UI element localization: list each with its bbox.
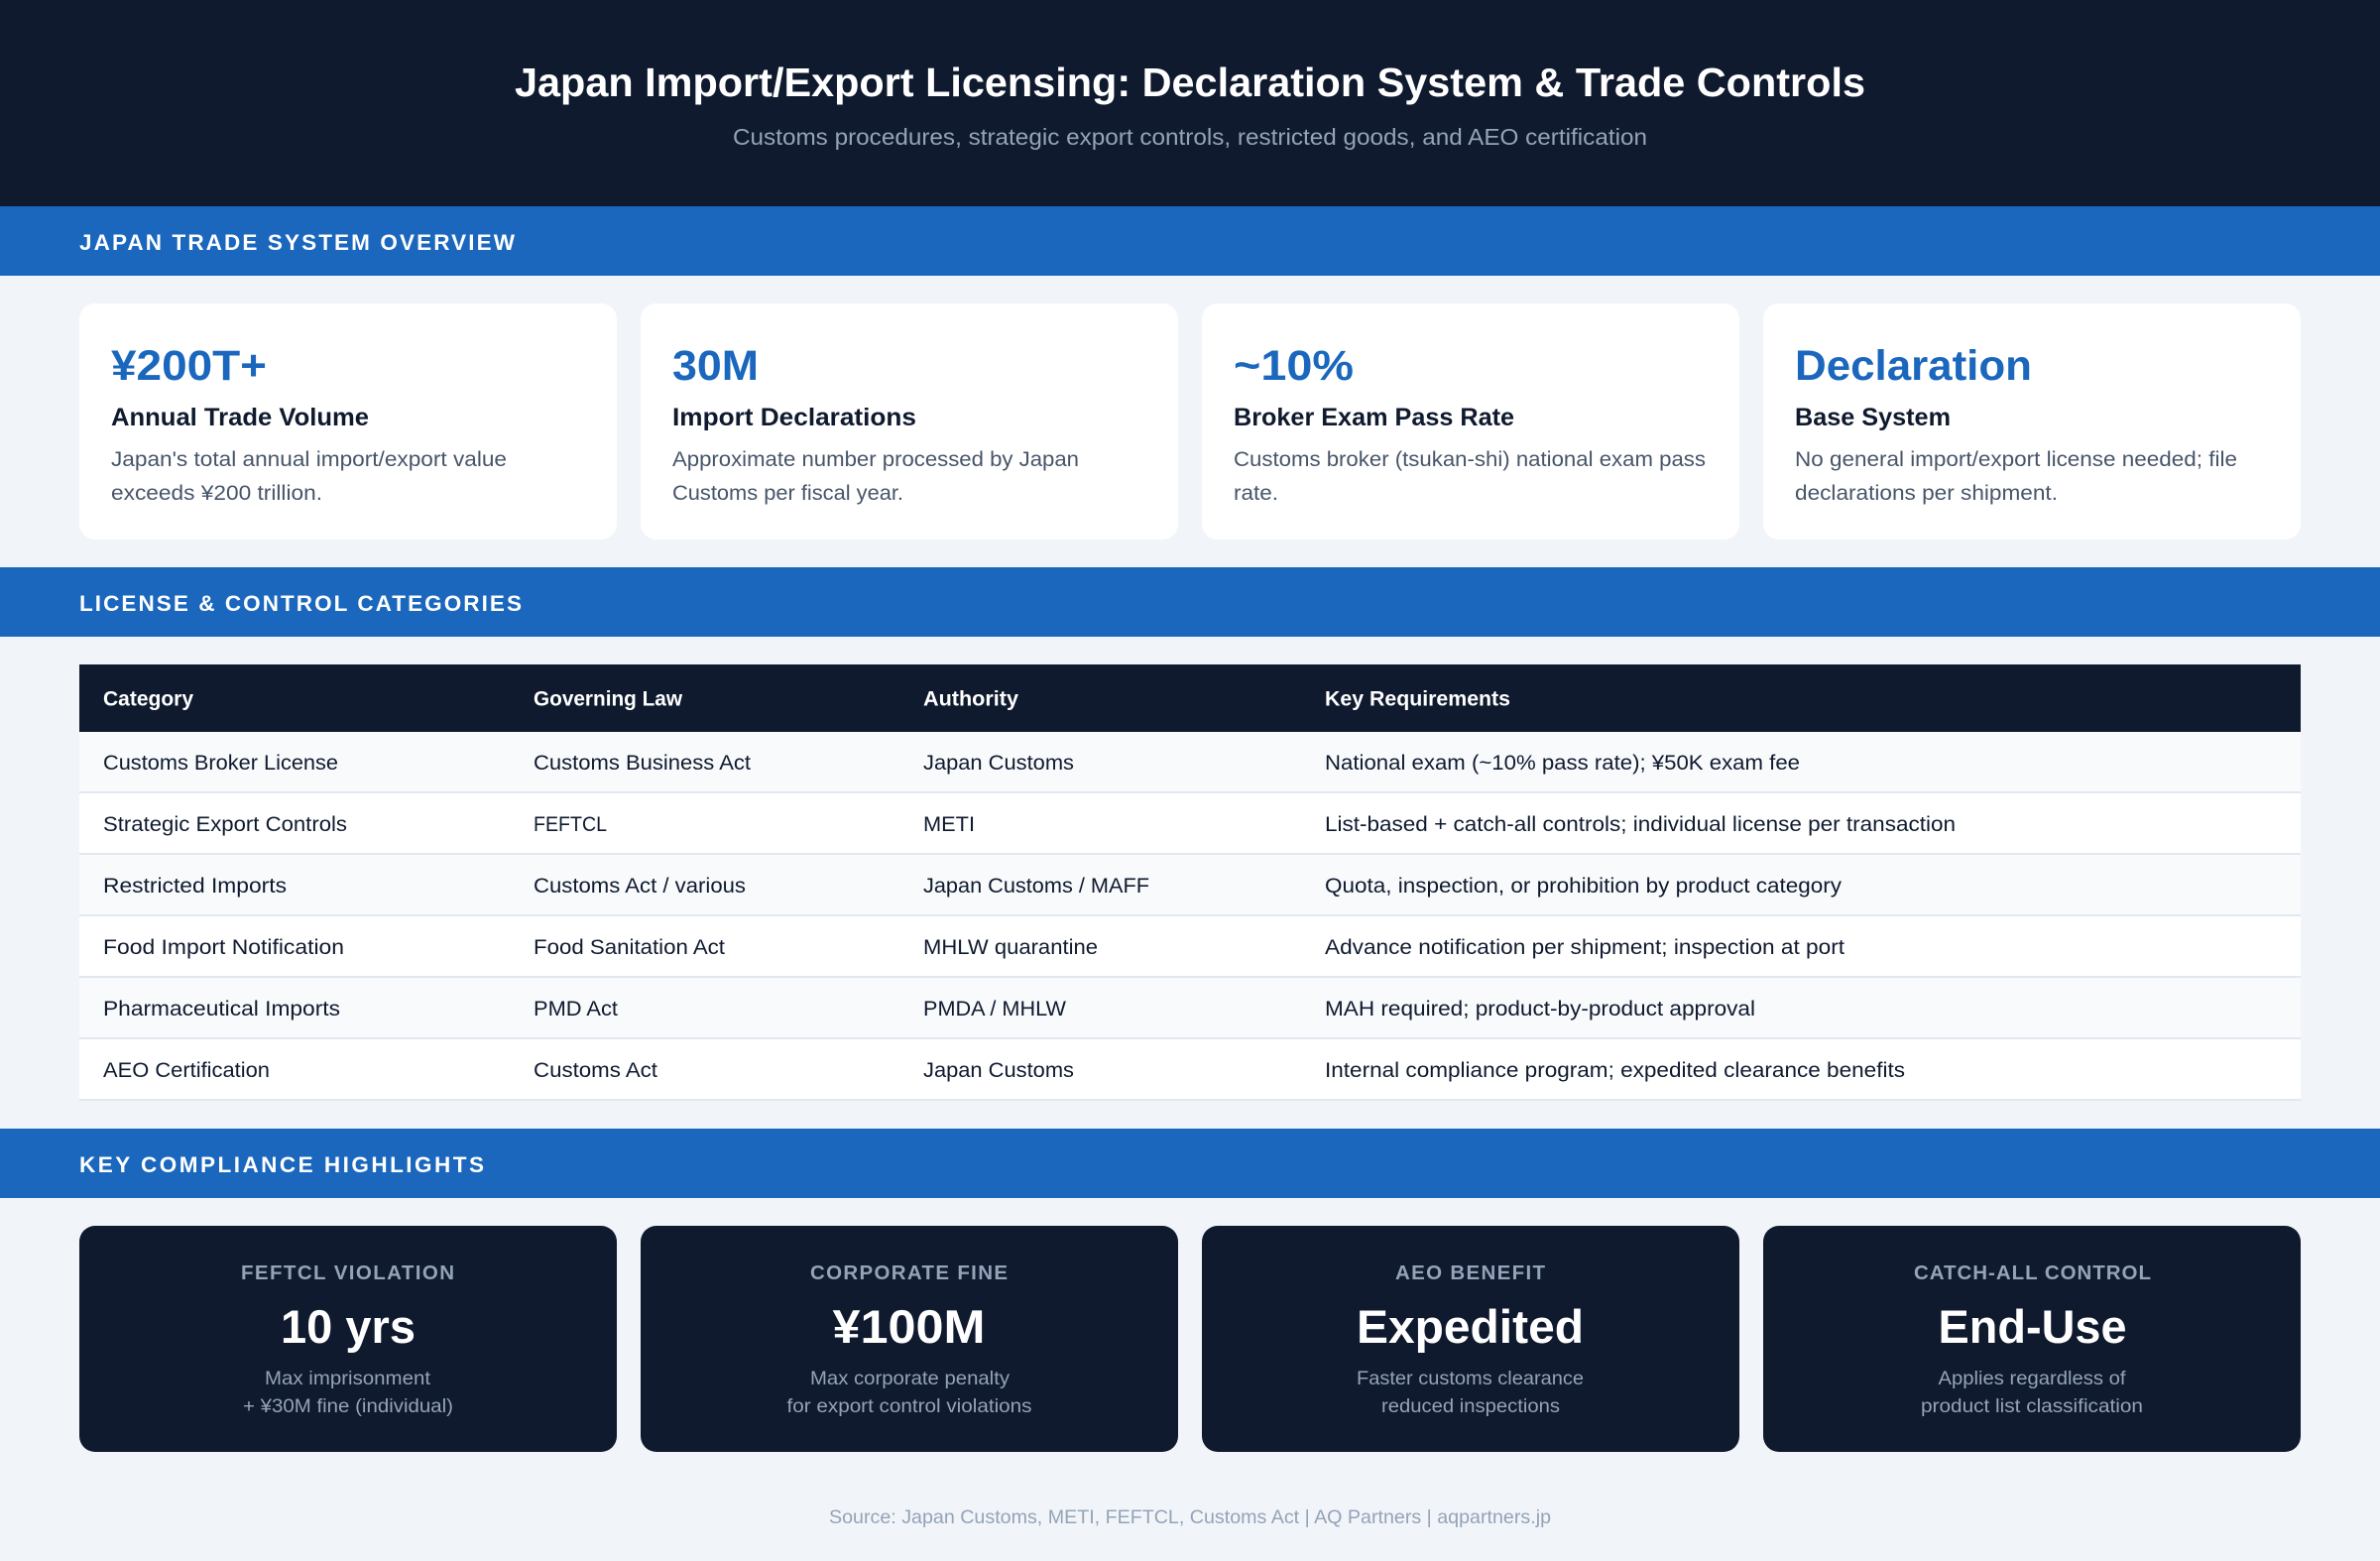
table row: food import notification: Advance notification per shipment; inspection at port (1325, 935, 1844, 959)
table row: strategic export controls (79, 793, 2301, 855)
panel: highlight corporate fine: Max corporate penalty (810, 1368, 1010, 1389)
panel: stat card import declarations: Customs per fiscal year. (672, 481, 903, 505)
table row: pharmaceutical imports: PMDA / MHLW (923, 997, 1067, 1021)
panel: stat card trade volume: Japan's total annual import/export value (111, 447, 507, 471)
panel: highlight FEFTCL violation: 10 yrs (281, 1300, 416, 1353)
panel: stat card trade volume (79, 303, 617, 540)
table row: food import notification: Food Sanitation Act (534, 935, 725, 959)
table row: AEO certification: Customs Act (534, 1058, 657, 1082)
table row: AEO certification: AEO Certification (103, 1058, 270, 1082)
section heading: categories: LICENSE & CONTROL CATEGORIES (79, 591, 522, 616)
panel: highlight corporate fine: CORPORATE FINE (810, 1261, 1008, 1284)
subtitle: Customs procedures, strategic export controls, restricted goods, and AEO certification (733, 124, 1647, 150)
table row: food import notification: Food Import Notification (103, 935, 344, 959)
section heading: categories (0, 567, 2380, 637)
panel: stat card import declarations: Import Declarations (672, 404, 916, 431)
panel: stat card broker exam (1202, 303, 1739, 540)
table row: customs broker license: Customs Business Act (534, 751, 751, 775)
panel: stat card base system (1763, 303, 2301, 540)
panel: stat card trade volume: ¥200T+ (111, 342, 267, 390)
table row: strategic export controls: FEFTCL (534, 812, 607, 836)
table header row: Authority (923, 686, 1018, 710)
panel: highlight FEFTCL violation: FEFTCL VIOLATION (241, 1261, 454, 1284)
panel: stat card import declarations: 30M (672, 342, 759, 390)
table row: customs broker license: Japan Customs (923, 751, 1074, 775)
table row: customs broker license: Customs Broker License (103, 751, 338, 775)
table row: restricted imports: Quota, inspection, or prohibition by product category (1325, 874, 1842, 898)
table row: pharmaceutical imports: Pharmaceutical Imports (103, 997, 340, 1021)
panel: highlight AEO benefit: Expedited (1357, 1300, 1584, 1353)
table row: strategic export controls: List-based + catch-all controls; individual license per transaction (1325, 812, 1956, 836)
panel: stat card base system: Declaration (1795, 342, 2032, 390)
panel: highlight catch-all control: End-Use (1938, 1300, 2126, 1353)
title: Japan Import/Export Licensing: Declaration System & Trade Controls (515, 60, 1865, 105)
table row: restricted imports (79, 855, 2301, 916)
panel: stat card import declarations (641, 303, 1178, 540)
table: license and control categories (79, 664, 2301, 1101)
section heading: overview (0, 206, 2380, 276)
panel: stat card trade volume: Annual Trade Volume (111, 404, 369, 431)
panel: highlight catch-all control (1763, 1226, 2301, 1452)
table row: restricted imports: Japan Customs / MAFF (923, 874, 1149, 898)
panel: stat card base system: declarations per shipment. (1795, 481, 2058, 505)
table row: AEO certification (79, 1039, 2301, 1101)
table header row: Category (103, 686, 193, 710)
section heading: highlights (0, 1129, 2380, 1198)
panel: highlight corporate fine: ¥100M (833, 1300, 986, 1353)
table row: pharmaceutical imports (79, 978, 2301, 1039)
panel: highlight AEO benefit: reduced inspections (1381, 1395, 1560, 1417)
panel: highlight FEFTCL violation (79, 1226, 617, 1452)
table header row: Governing Law (534, 686, 682, 710)
panel: highlight FEFTCL violation: Max imprisonment (265, 1368, 431, 1389)
table row: strategic export controls: Strategic Export Controls (103, 812, 347, 836)
panel: highlight corporate fine: for export control violations (787, 1395, 1032, 1417)
panel: stat card broker exam: Broker Exam Pass Rate (1234, 404, 1514, 431)
panel: highlight FEFTCL violation: + ¥30M fine (individual) (243, 1395, 453, 1417)
panel: highlight corporate fine (641, 1226, 1178, 1452)
panel: highlight AEO benefit: Faster customs clearance (1357, 1368, 1584, 1389)
panel: stat card broker exam: Customs broker (tsukan-shi) national exam pass (1234, 447, 1706, 471)
panel: stat card base system: No general import/export license needed; file (1795, 447, 2237, 471)
source footer: Source: Japan Customs, METI, FEFTCL, Customs Act | AQ Partners | aqpartners.jp (829, 1506, 1551, 1528)
panel: highlight AEO benefit (1202, 1226, 1739, 1452)
table row: customs broker license: National exam (~10% pass rate); ¥50K exam fee (1325, 751, 1800, 775)
panel: stat card trade volume: exceeds ¥200 trillion. (111, 481, 322, 505)
table row: food import notification: MHLW quarantine (923, 935, 1098, 959)
section heading: overview: JAPAN TRADE SYSTEM OVERVIEW (79, 230, 516, 255)
section heading: highlights: KEY COMPLIANCE HIGHLIGHTS (79, 1152, 484, 1177)
table row: food import notification (79, 916, 2301, 978)
panel: highlight AEO benefit: AEO BENEFIT (1395, 1261, 1545, 1284)
table row: restricted imports: Restricted Imports (103, 874, 287, 898)
table row: AEO certification: Japan Customs (923, 1058, 1074, 1082)
table row: AEO certification: Internal compliance program; expedited clearance benefits (1325, 1058, 1905, 1082)
panel: highlight catch-all control: product list classification (1921, 1395, 2143, 1417)
table row: strategic export controls: METI (923, 812, 975, 836)
panel: stat card broker exam: ~10% (1234, 342, 1354, 390)
table header row (79, 664, 2301, 732)
header banner (0, 0, 2380, 206)
table row: pharmaceutical imports: MAH required; product-by-product approval (1325, 997, 1755, 1021)
table header row: Key Requirements (1325, 686, 1510, 710)
panel: highlight catch-all control: Applies regardless of (1938, 1368, 2126, 1389)
table row: restricted imports: Customs Act / various (534, 874, 746, 898)
table row: customs broker license (79, 732, 2301, 793)
panel: highlight catch-all control: CATCH-ALL CONTROL (1914, 1261, 2151, 1284)
panel: stat card broker exam: rate. (1234, 481, 1278, 505)
table row: pharmaceutical imports: PMD Act (534, 997, 618, 1021)
panel: stat card base system: Base System (1795, 404, 1951, 431)
panel: stat card import declarations: Approximate number processed by Japan (672, 447, 1079, 471)
